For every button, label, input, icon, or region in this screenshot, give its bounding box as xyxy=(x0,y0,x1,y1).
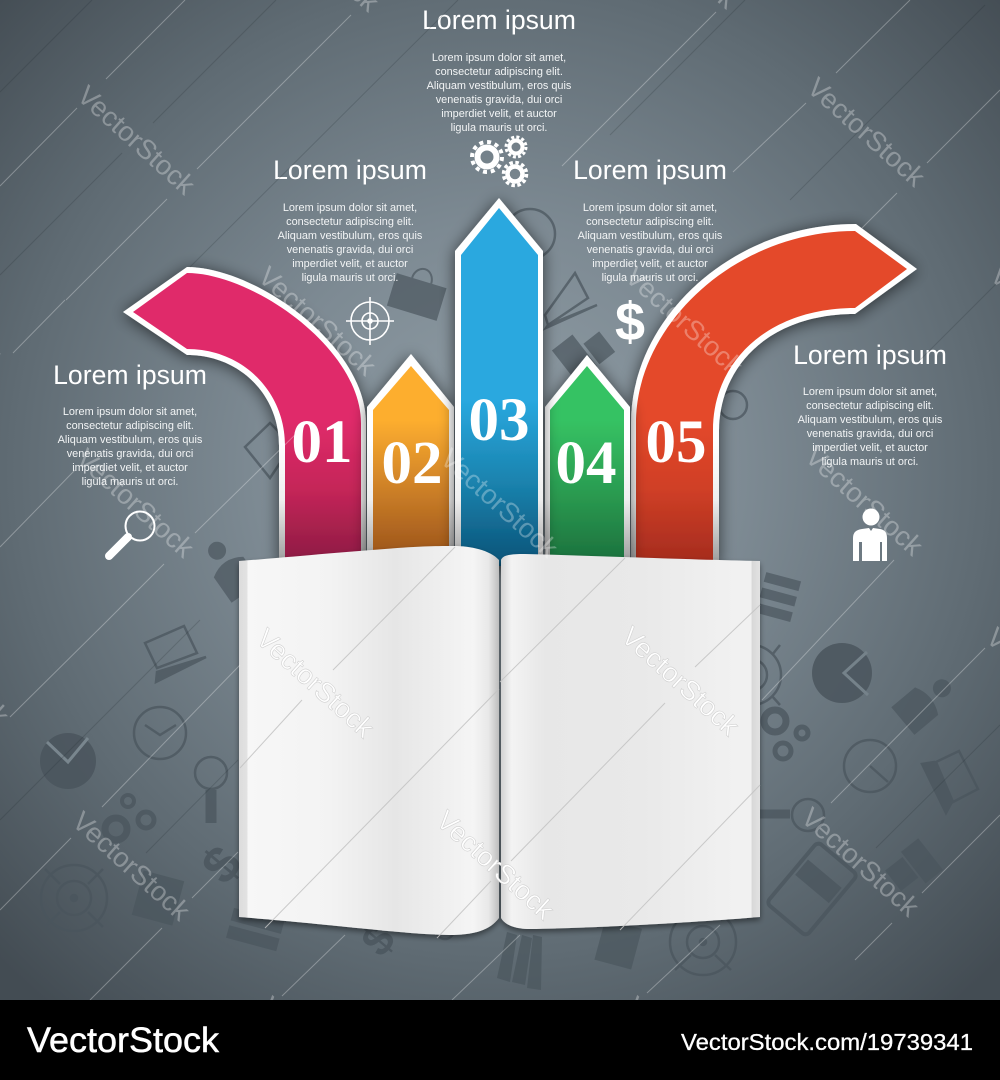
text block 4: Lorem ipsum xyxy=(573,155,727,185)
ghost icon: target bottom xyxy=(670,909,736,975)
ghost icon: binders bottom xyxy=(497,932,542,990)
text block 5: venenatis gravida, dui orci xyxy=(807,428,933,440)
text block 1: Lorem ipsum xyxy=(53,360,207,390)
watermark text: VectorStock xyxy=(66,805,196,927)
text block 4: consectetur adipiscing elit. xyxy=(586,216,714,228)
text block 5: consectetur adipiscing elit. xyxy=(806,400,934,412)
ghost icon: phone xyxy=(766,842,858,936)
text block 4 xyxy=(573,155,727,284)
text block 3: venenatis gravida, dui orci xyxy=(436,94,562,106)
watermark text on book: VectorStock xyxy=(430,804,560,926)
ghost icon: laptop lower left xyxy=(145,626,206,682)
ghost icon: clock right xyxy=(844,740,896,792)
watermark text: VectorStock xyxy=(801,71,931,193)
text block 4: ligula mauris ut orci. xyxy=(602,272,698,284)
ghost icon: clock behind blue arrow xyxy=(505,209,555,259)
watermark text: VectorStock xyxy=(799,440,929,562)
text block 5: imperdiet velit, et auctor xyxy=(812,442,928,454)
ghost icon: buildings xyxy=(552,320,615,382)
ghost icon: binders lower left xyxy=(226,908,284,951)
icon: businessman white xyxy=(853,508,887,561)
watermark text: VectorStock xyxy=(619,260,749,382)
arrow 01 pink xyxy=(123,267,366,566)
text block 5: ligula mauris ut orci. xyxy=(822,456,918,468)
ghost icon: gear bottom xyxy=(436,921,454,939)
ghost icon: magnifier xyxy=(195,757,227,823)
text block 5 xyxy=(793,340,947,468)
text block 1: Aliquam vestibulum, eros quis xyxy=(58,434,203,446)
icon: magnifier white xyxy=(109,512,154,556)
number 02: 02 xyxy=(382,430,442,497)
text block 1: consectetur adipiscing elit. xyxy=(66,420,194,432)
icon: target white xyxy=(346,297,394,345)
text block 2: ligula mauris ut orci. xyxy=(302,272,398,284)
ghost icon: binders right xyxy=(755,572,801,622)
ghost icon: target right xyxy=(721,645,781,705)
right page xyxy=(501,554,760,929)
ghost icon: ring xyxy=(719,391,747,419)
text block 1: ligula mauris ut orci. xyxy=(82,476,178,488)
ghost icon: dollar lower left: $ xyxy=(190,835,254,895)
watermark text on book xyxy=(250,620,745,926)
ghost icon: target lower left xyxy=(41,865,107,931)
watermark text: VectorStock xyxy=(70,442,200,564)
text block 2: Aliquam vestibulum, eros quis xyxy=(278,230,423,242)
open book xyxy=(239,546,760,935)
text block 3: ligula mauris ut orci. xyxy=(451,122,547,134)
text block 4: venenatis gravida, dui orci xyxy=(587,244,713,256)
text block 1: Lorem ipsum dolor sit amet, xyxy=(63,406,197,418)
watermark text: VectorStock xyxy=(795,801,925,923)
arrow 05 red xyxy=(631,224,917,566)
background ghost icons xyxy=(40,209,978,990)
text block 2: venenatis gravida, dui orci xyxy=(287,244,413,256)
ghost icon: laptop right xyxy=(922,751,978,813)
ghost icon: briefcase lower left xyxy=(132,870,184,926)
text block 3: imperdiet velit, et auctor xyxy=(441,108,557,120)
text block 1: venenatis gravida, dui orci xyxy=(67,448,193,460)
arrow 03 blue xyxy=(455,198,543,566)
ghost icon: person right xyxy=(891,669,960,735)
number 04: 04 xyxy=(556,430,616,497)
number 05: 05 xyxy=(646,409,706,476)
icon: gears white xyxy=(472,137,526,186)
text block 1 xyxy=(53,360,207,488)
watermark text: VectorStock xyxy=(71,79,201,201)
text block 2: consectetur adipiscing elit. xyxy=(286,216,414,228)
watermark text on book: VectorStock xyxy=(250,622,380,744)
watermark text on book: VectorStock xyxy=(615,620,745,742)
text block 3: consectetur adipiscing elit. xyxy=(435,66,563,78)
icon: dollar white: $ xyxy=(615,292,645,352)
ghost icon: dollar bottom: $ xyxy=(352,915,405,965)
number 03: 03 xyxy=(468,387,530,454)
ghost icon: person left xyxy=(197,533,261,603)
footer bar xyxy=(0,1000,1000,1080)
watermark lines on book xyxy=(240,547,760,938)
text block 2: Lorem ipsum xyxy=(273,155,427,185)
ghost icon: gears lower left xyxy=(105,795,154,840)
number 01: 01 xyxy=(292,409,352,476)
ghost icon: briefcase bottom xyxy=(594,919,642,969)
text block 4: imperdiet velit, et auctor xyxy=(592,258,708,270)
ghost icon: pie lower left xyxy=(40,733,96,789)
ghost icon: building right xyxy=(882,838,943,898)
ghost icon: clock lower left xyxy=(134,707,186,759)
footer url: VectorStock.com/19739341 xyxy=(681,1029,973,1055)
text block 5: Aliquam vestibulum, eros quis xyxy=(798,414,943,426)
text block 2: imperdiet velit, et auctor xyxy=(292,258,408,270)
arrow 02 orange xyxy=(367,354,454,566)
ghost icon: laptop top xyxy=(545,273,597,328)
ghost icon: pie right xyxy=(812,643,872,703)
text block 2 xyxy=(273,155,427,284)
watermark text: VectorStock xyxy=(434,442,564,564)
footer logo: VectorStock xyxy=(27,1021,220,1060)
ghost icon: gears right xyxy=(764,710,808,759)
text block 3: Lorem ipsum dolor sit amet, xyxy=(432,52,566,64)
text block 3: Lorem ipsum xyxy=(422,5,576,35)
text block 5: Lorem ipsum xyxy=(793,340,947,370)
text block 2: Lorem ipsum dolor sit amet, xyxy=(283,202,417,214)
text block 5: Lorem ipsum dolor sit amet, xyxy=(803,386,937,398)
text block 4: Lorem ipsum dolor sit amet, xyxy=(583,202,717,214)
text block 3 xyxy=(422,5,576,134)
text block 4: Aliquam vestibulum, eros quis xyxy=(578,230,723,242)
text block 3: Aliquam vestibulum, eros quis xyxy=(427,80,572,92)
arrow 04 green xyxy=(545,355,630,566)
ghost icon: diamond xyxy=(245,423,292,478)
text block 1: imperdiet velit, et auctor xyxy=(72,462,188,474)
watermark text: VectorStock xyxy=(252,260,382,382)
ghost icon: briefcase xyxy=(387,262,450,321)
left page xyxy=(239,546,499,935)
ghost icon: magnifier right xyxy=(760,799,824,831)
